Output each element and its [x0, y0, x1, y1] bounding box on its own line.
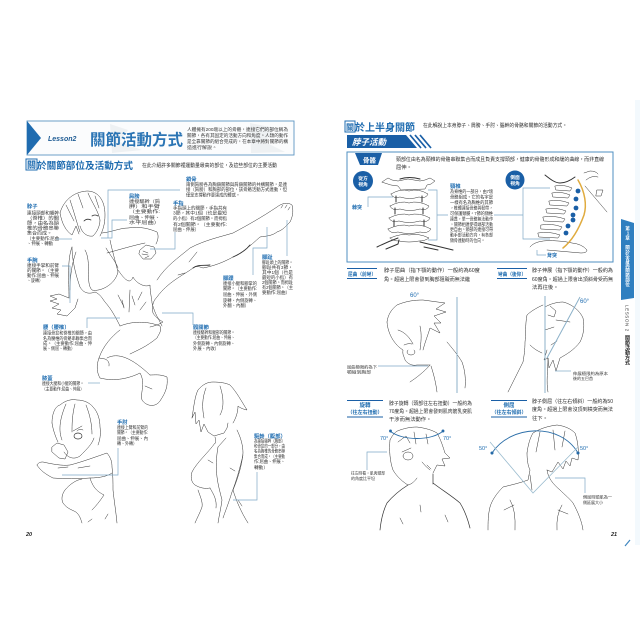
label: toes: 腳趾共有3節， — [262, 264, 293, 271]
label: ankle — [223, 227, 267, 309]
note: rotation — [351, 452, 387, 481]
lesson number: Lesson2 — [48, 136, 77, 143]
angle labels — [479, 446, 588, 452]
label: cervical spine: 骨骼組成。它的名字是 — [450, 194, 493, 200]
label: waist: 成。（主要動作:屈曲、伸 — [43, 340, 92, 347]
note: flexion limit: 屈曲極限約為下 — [347, 364, 377, 370]
label: back process — [537, 250, 557, 259]
note: lateral: 側延展大小 — [583, 500, 603, 505]
page number left: 20 — [25, 532, 32, 538]
extension description: 脖子伸展（指下顎的動作）一般約為 — [532, 266, 613, 274]
label: knee — [42, 374, 100, 392]
extension description: 法再往後。 — [532, 283, 558, 291]
label: ankle: 旋轉、內側旋轉、 — [223, 297, 257, 304]
label: cervical spine: 頸骨連動時的位向。 — [450, 237, 485, 244]
section: lateral bending — [479, 397, 613, 530]
label: cervical spine — [450, 182, 493, 244]
angle label: 60° — [410, 293, 420, 299]
label: ankle: 外翻、內翻） — [223, 302, 249, 309]
label: ankle: 腳踝 — [223, 274, 234, 282]
note: extension limit: 伸展極限約為原本 — [573, 371, 608, 376]
label: waist: 展、側屈、轉動） — [43, 345, 75, 352]
label: fingers: 屈曲、伸展） — [173, 226, 199, 233]
icon: front view badge: 從方 — [358, 175, 368, 182]
reference lines — [490, 442, 578, 493]
heading: upper body joints: 於上半身關節 — [355, 121, 415, 134]
label: neck — [27, 202, 72, 247]
note: rotation: 往左時看，肌肉頸部 — [351, 470, 385, 476]
label: knee: （主要動作:屈曲、伸展） — [42, 386, 84, 392]
vertical lesson label — [624, 305, 630, 365]
label: fingers: 手指頭上的關節，手指共有 — [173, 204, 227, 212]
extension description — [532, 266, 613, 291]
note: extension limit — [555, 371, 608, 381]
heading description: 在此介紹許多關節裡運動量最高的部位，及這些部位的主要活動 — [142, 161, 277, 169]
lateral description: 度角。超過上限會沒頂到橫突而無法 — [532, 405, 613, 413]
flexion description: 脖子屈曲（指下顎的動作）一般約為60度 — [384, 266, 481, 274]
label: spinous process: 棘突 — [352, 204, 362, 211]
label: neck: 連接頭部和軀幹 — [27, 210, 60, 216]
label: neck: 椎的骨骼串聯 — [27, 224, 60, 232]
label: fingers: 手指 — [173, 199, 184, 207]
reference lines — [545, 296, 580, 393]
angle labels: 50° — [479, 446, 487, 452]
label: hip joint: 外側旋轉、內側旋轉、 — [193, 340, 235, 347]
icon: front view badge: 視角 — [358, 181, 368, 188]
angle labels: 70° — [380, 436, 388, 442]
icon: side view badge — [506, 170, 524, 190]
icon: front view badge — [353, 171, 373, 191]
label: elbow: 轉、外轉） — [117, 440, 137, 447]
section: rotation — [347, 399, 473, 530]
tag: lateral bending: （往左右傾斜） — [491, 409, 527, 416]
rotation description: 70度角。超過上限會發到肌肉筋乳突肌 — [389, 407, 473, 415]
label: waist: 連接骨盆和脊椎的關節，由 — [43, 330, 92, 336]
label: trunk: 轉動） — [254, 464, 268, 471]
section bar: neck movement — [347, 135, 431, 148]
label: collarbone: 接（肩膀）和胸部的部位，該骨骼活動方式連動，但 — [186, 186, 287, 193]
label: cervical spine: 更自由。頸部的連接可帶 — [450, 226, 493, 233]
label: cervical spine: 頸椎 — [450, 182, 461, 190]
label: elbow: 屈曲、伸展、內 — [117, 435, 148, 442]
label: cervical spine: ，關節相連使得頭部活動 — [450, 221, 493, 228]
label: cervical spine: 一樣有名為胸椎的其節 — [450, 199, 493, 206]
label: knee: 膝蓋 — [42, 374, 53, 382]
rotation description: 脖子旋轉（頭部往左右扭動）一般約為 — [389, 399, 472, 407]
angle labels — [380, 436, 451, 442]
tab: skeleton — [355, 153, 382, 165]
label: wrist — [27, 256, 70, 303]
label: trunk: 集合而成。（主要動 — [254, 453, 285, 460]
bracket: cervical spine — [428, 190, 448, 240]
label: fingers: 的小指）有2個關節。而拇指 — [173, 215, 227, 222]
label: waist — [43, 318, 120, 352]
label: spinous process — [352, 197, 393, 211]
banner description: 人體擁有200塊以上的骨骼，連接它們的部位稱為 — [187, 126, 289, 133]
label: neck: 脖子 — [27, 202, 38, 210]
label: shoulder: 水平屈曲） — [129, 219, 160, 226]
tag: lateral bending: 側屈 — [503, 401, 515, 409]
tag: lateral bending — [491, 400, 527, 417]
arc: rotation range — [390, 430, 444, 438]
illustration: flexion head — [387, 300, 465, 392]
label: wrist: 、旋轉） — [27, 277, 43, 284]
label: neck: （脊椎）的關 — [27, 214, 60, 222]
label: ankle: 屈曲、伸展、外側 — [223, 291, 257, 298]
label: wrist: 動作:屈曲、伸展 — [27, 272, 59, 279]
skeleton description: 屈伸。 — [396, 163, 412, 171]
label: toes: 腳趾頭上的關節。 — [262, 259, 293, 266]
label: shoulder: （主要動作: — [129, 208, 160, 215]
label: trunk: 和骨盆的一部分，由 — [254, 442, 285, 450]
label: fingers — [150, 199, 228, 249]
label: toes: 其中1個（也是 — [262, 269, 294, 276]
tag: flexion: 屈曲（前彎） — [348, 271, 376, 278]
label: toes: 有2個關節。（主 — [262, 284, 293, 291]
figure: high kick pose — [50, 191, 293, 405]
label: wrist: 連接手掌和前臂 — [27, 262, 60, 269]
label: shoulder: 胛）和手臂 — [129, 203, 161, 210]
flexion description: 角。超過上限會發到胸部阻礙而無法繼 — [384, 275, 471, 283]
section: extension — [497, 266, 613, 393]
section: flexion — [347, 266, 481, 393]
corner mark — [625, 540, 630, 546]
icon: banner arrow — [27, 121, 41, 155]
skeleton description: 頸部位由名為頸椎的骨骼串聯集合而成且負責支撐頭部，健康的骨骼形成和緩的曲線，而非直線 — [396, 155, 605, 163]
icon: side view badge: 側面 — [510, 174, 520, 181]
heading: upper body joints: 關 — [346, 123, 354, 132]
label: toes: 要動作:屈曲） — [262, 289, 290, 296]
figure: bent elbow bust — [37, 400, 117, 523]
note: lateral — [555, 478, 612, 505]
illustration: cervical spine side — [530, 171, 607, 253]
label: back process: 背突 — [547, 252, 557, 259]
label: cervical spine: 動手部活動方向，有各部 — [450, 232, 493, 238]
tab: chapter — [621, 219, 634, 300]
banner description: 是全靠關節的組合完成的，在本章中將對關節的構 — [187, 138, 289, 145]
icon: numbered vertebrae — [564, 189, 580, 235]
illustration: extension head — [508, 302, 584, 392]
angle labels: 70° — [443, 436, 451, 442]
icon: side view badge: 視角 — [510, 180, 520, 187]
label: collarbone — [108, 175, 287, 238]
label: hip joint: （主要動作:屈曲、伸展、 — [193, 334, 235, 341]
tag: rotation — [347, 400, 383, 417]
label: fingers: 有2個關節。（主要動作: — [173, 221, 227, 228]
label: cervical spine: 為脊椎的一部分，由7塊 — [450, 188, 493, 195]
heading description: 在此解說上本身脖子、肩膀、手肘、腦幹的骨骼和關節的活動方式。 — [423, 121, 567, 129]
panel: left page lesson banner — [27, 121, 294, 155]
banner description — [187, 126, 289, 151]
label: neck: 、伸展、轉動 — [27, 240, 53, 247]
label: shoulder — [101, 192, 161, 238]
label: toes: 腳趾 — [262, 253, 273, 261]
label: elbow: 手肘 — [117, 418, 128, 426]
tab: chapter: 第1章 關於全身與關節部位 — [625, 225, 630, 287]
tag: extension: 彎曲（後仰） — [498, 271, 526, 278]
label: trunk: 作:屈曲、伸展、 — [254, 458, 285, 465]
label: toes: 最短的小指）有 — [262, 274, 293, 281]
label: knee: 連接大腿和小腿的關節。 — [42, 380, 84, 387]
label: trunk: 名為胸椎的骨骼串聯 — [254, 448, 285, 454]
label: elbow: 連接上臂和前臂的 — [117, 424, 148, 431]
illustration: lateral head — [488, 425, 583, 530]
angle label: 60° — [580, 299, 590, 305]
label: cervical spine: 可保護頸髓。7節的頸椎 — [450, 210, 493, 217]
heading: joints and movement: 關 — [27, 160, 36, 170]
illustration: cervical spine front — [377, 178, 453, 250]
figure: side torso — [191, 382, 248, 523]
page number right: 21 — [610, 532, 617, 538]
label: toes: 2個關節。而拇趾 — [262, 279, 293, 286]
lateral description: 往下。 — [532, 414, 548, 422]
label: collarbone: 兩側肩膀各為胸鎖關節與肩鎖關節的共構關節，是連 — [186, 181, 287, 188]
lateral description: 脖子側屈（往左右傾斜）一般約為50 — [532, 397, 613, 405]
vertical lesson label: LESSON 2 — [624, 305, 630, 332]
label: elbow — [62, 418, 148, 475]
title: 關節活動方式 — [90, 130, 183, 149]
label: collarbone: 鎖骨 — [186, 175, 197, 183]
label: ankle: 連接小腿和腳掌的 — [223, 280, 257, 287]
label: shoulder: 屈曲、伸展、 — [129, 214, 160, 221]
label: hip joint: 外展、內收） — [193, 345, 219, 352]
label: cervical spine: ，椎體連接骨骼與韌帶， — [450, 204, 493, 212]
label: shoulder: 肩膀 — [129, 192, 140, 200]
label: fingers: 3節，其中1個（也是最短 — [173, 210, 228, 216]
note: flexion limit: 顎碰到胸部 — [347, 370, 371, 374]
note: lateral: 側屈時頸肌為一 — [583, 494, 612, 500]
label: neck: 節，由名為頸 — [27, 220, 60, 226]
note: flexion limit — [347, 364, 428, 374]
label: wrist: 的關節。（主要 — [27, 267, 60, 274]
lateral description — [532, 397, 613, 422]
label: hip joint — [162, 313, 235, 352]
label: collarbone: 僅是支撐動作要達成的體感。 — [186, 192, 240, 198]
label: trunk: 為連接驅幹（胸部） — [254, 438, 285, 444]
angle labels: 50° — [580, 446, 588, 452]
banner description: 關節，各有其固定的活動方向和角度。人類的動作 — [187, 132, 289, 139]
label: shoulder: 連接驅幹（肩 — [129, 198, 160, 205]
reference line — [456, 297, 458, 393]
bracket: side spine — [494, 188, 550, 239]
label: hip joint: 髖關節 — [193, 323, 210, 331]
skeleton description — [396, 155, 605, 171]
label: cervical spine: 連貫，單一骨骼無法動作 — [450, 216, 493, 222]
note: extension limit: 後的五巴首 — [573, 376, 593, 381]
panel: skeleton — [347, 152, 613, 262]
rotation description: 干涉而無法動作。 — [389, 415, 431, 423]
tab: skeleton: 骨骼 — [363, 156, 376, 164]
flexion description — [384, 266, 481, 283]
vertical lesson label: 關節活動方式 — [624, 334, 630, 365]
label: toes — [262, 220, 294, 296]
section bar: neck movement: 脖子活動 — [352, 137, 388, 147]
label: ankle: 關節。（主要動作: — [223, 285, 257, 292]
banner description: 造進行解說。 — [187, 144, 217, 151]
label: hip joint: 連接驅幹和腿部的關節。 — [193, 329, 235, 336]
tag: rotation: 旋轉 — [359, 401, 371, 409]
tag: rotation: （往左右扭動） — [347, 409, 383, 416]
label: trunk — [233, 432, 286, 500]
label: waist: 腰（腰椎） — [43, 323, 70, 331]
illustration: rotation head — [380, 427, 470, 530]
label: neck: 集合而成。 — [27, 230, 52, 236]
heading: joints and movement: 於關節部位及活動方式 — [37, 160, 133, 172]
label: neck: （主要動作:屈曲 — [27, 235, 59, 242]
rotation description — [389, 399, 473, 423]
label: elbow: 關節。（主要動作: — [117, 429, 148, 436]
label: trunk: 驅幹（腹部） — [254, 432, 286, 440]
label: wrist: 手腕 — [27, 256, 38, 264]
note: rotation: 的角度比平坦 — [351, 476, 375, 481]
arc: lateral range — [491, 431, 579, 454]
label: waist: 名為腰椎的骨骼串聯集合而 — [43, 335, 92, 342]
extension description: 60度角。超過上限會出頂斜骨受而無 — [532, 275, 613, 283]
